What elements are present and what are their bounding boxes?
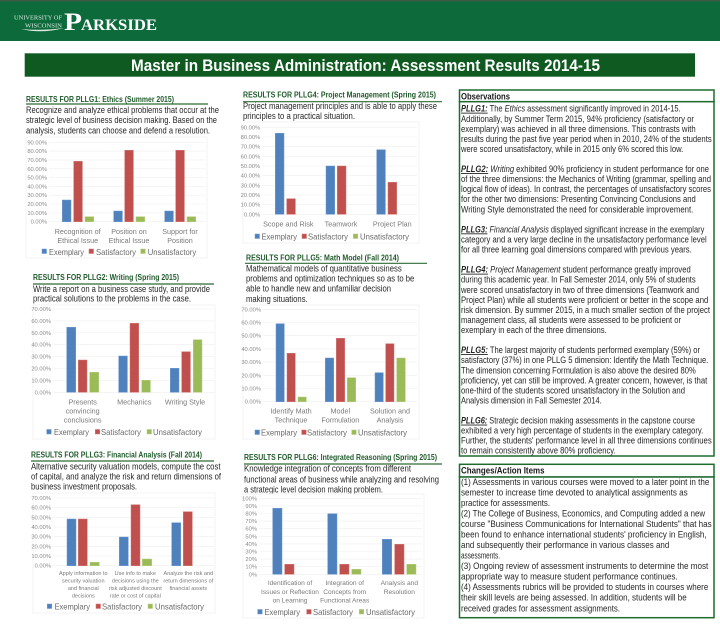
legend: PLLG2: Unsatisfactory: [153, 427, 203, 437]
bar chart: PLLG6: 70%: [245, 519, 257, 525]
bar chart: PLLG4: 60.00%: [241, 154, 260, 160]
header band: [0, 0, 720, 41]
panel: Changes/Action Items: [460, 464, 714, 618]
bar chart: PLLG2: 60.00%: [31, 319, 51, 325]
bar chart: PLLG2: convincing: [66, 406, 100, 416]
bar chart: PLLG1: 40.00%: [27, 184, 47, 190]
bar chart: PLLG2: [31, 305, 215, 439]
bar chart: PLLG1: 0.00%: [31, 220, 47, 226]
logo: University of Wisconsin Parkside: P: [64, 9, 82, 36]
legend: PLLG1: Satisfactory: [96, 247, 137, 257]
bar chart: PLLG5: Identify Math: [270, 406, 312, 415]
legend: PLLG2: Exemplary: [54, 427, 90, 437]
description: PLLG5: problems and optimization techniques so as to be: [246, 274, 414, 284]
bar chart: PLLG1: 50.00%: [27, 176, 47, 182]
text block: observations body: exemplary) was achieved in all three dimensions. This contrasts with: [461, 124, 696, 134]
legend: PLLG6: Satisfactory: [313, 607, 354, 617]
legend: PLLG5: Unsatisfactory: [358, 428, 408, 438]
legend: PLLG5: [255, 428, 408, 438]
bar chart: PLLG6: Integration of: [325, 580, 364, 587]
description: PLLG6: Knowledge integration of concepts from different: [244, 464, 411, 474]
description: PLLG3: business investment proposals.: [31, 481, 137, 491]
description: PLLG1: strategic level of business decision making. Based on the: [26, 115, 217, 125]
legend: PLLG5: Exemplary: [261, 428, 298, 438]
description: PLLG6: functional areas of business while analyzing and resolving: [244, 474, 439, 484]
bar chart: PLLG1: 90.00%: [27, 140, 47, 146]
bar chart: PLLG5: 30.00%: [241, 360, 261, 366]
bar chart: PLLG1: [26, 137, 207, 258]
bar chart: PLLG2: 70.00%: [31, 307, 51, 313]
text block: observations body: to remain consistently above 80% proficiency.: [461, 446, 616, 456]
text block: observations body: management class, all students were assessed to be proficient or: [461, 315, 681, 325]
bar chart: PLLG6: [242, 494, 424, 618]
legend: PLLG3: Unsatisfactory: [155, 602, 205, 612]
title banner: Master in Business Administration: Assessment Results 2014-15: [131, 56, 600, 75]
bar chart: PLLG1: 70.00%: [27, 158, 47, 164]
bar chart: PLLG4: Scope and Risk: [263, 220, 314, 229]
bar chart: PLLG6: Functional Areas: [320, 597, 370, 604]
bar chart: PLLG2: Presents: [69, 397, 97, 406]
description: PLLG4: [243, 101, 437, 121]
bar chart: PLLG2: Mechanics: [117, 397, 152, 406]
bar chart: PLLG3: 0.00%: [35, 564, 51, 570]
legend: PLLG4: Satisfactory: [308, 232, 349, 242]
description: PLLG3: Alternative security valuation models, compute the cost: [31, 462, 221, 472]
bar chart: PLLG3: return dimensions of: [163, 579, 214, 585]
bar chart: PLLG4: 20.00%: [241, 193, 260, 199]
bar chart: PLLG2: 10.00%: [31, 378, 51, 384]
text block: observations body: for all three learning goal dimensions compared with previous years.: [461, 244, 692, 254]
bar chart: PLLG1: 20.00%: [27, 202, 47, 208]
bar chart: PLLG3: 10.00%: [31, 554, 51, 560]
bar chart: PLLG5: Model: [331, 406, 350, 415]
bar chart: PLLG4: 10.00%: [241, 203, 260, 209]
heading: PLLG6: RESULTS FOR PLLG6: Integrated Reasoning (Spring 2015): [244, 453, 437, 462]
text block: action items body: received grades for assessment assignments.: [461, 604, 620, 614]
bar chart: PLLG1: Ethical Issue: [109, 236, 149, 245]
bar chart: PLLG2: 0.00%: [35, 390, 51, 396]
bar chart: PLLG6: 50%: [245, 534, 257, 540]
panel: PLLG4 Project Management: [241, 90, 442, 243]
bar chart: PLLG5: 40.00%: [241, 347, 261, 353]
description: PLLG6: a strategic level decision making problem.: [244, 485, 383, 495]
bar chart: PLLG4: [241, 122, 419, 243]
bar chart: PLLG2: Writing Style: [165, 397, 205, 406]
heading: Observations: Observations: [461, 91, 510, 101]
description: PLLG1: [26, 105, 219, 136]
bar chart: PLLG6: 20%: [245, 557, 257, 563]
bar chart: PLLG3: decisions using the: [112, 579, 159, 585]
text block: observations body: one-third of the students scored unsatisfactory in the Solution and: [461, 385, 685, 395]
logo: University of Wisconsin Parkside: WISCONSIN: [25, 24, 63, 30]
bar chart: PLLG5: 20.00%: [241, 373, 261, 379]
bar chart: PLLG6: 60%: [245, 527, 257, 533]
bar chart: PLLG2: 50.00%: [31, 331, 51, 337]
legend: PLLG1: Unsatisfactory: [148, 247, 197, 257]
bar chart: PLLG5: 70.00%: [241, 307, 261, 313]
heading: PLLG5: RESULTS FOR PLLG5: Math Model (Fall 2014): [246, 253, 399, 262]
bar chart: PLLG1: 80.00%: [27, 149, 47, 155]
bar chart: PLLG2: 40.00%: [31, 343, 51, 349]
text block: action items body: semester to increase time devoted to analytical assignments as: [461, 488, 688, 498]
bar chart: PLLG3: 50.00%: [31, 515, 51, 521]
bar chart: PLLG3: risk adjusted discount: [109, 586, 162, 592]
bar chart: PLLG2: 30.00%: [31, 355, 51, 361]
description: PLLG1: analysis, students can choose and defend a resolution.: [26, 126, 210, 136]
panel: Observations: [460, 90, 714, 456]
text block: observations body: were scored unsatisfactory, while in 2015 only 6% scored this low.: [460, 144, 683, 154]
bar chart: PLLG5: 60.00%: [241, 320, 261, 326]
logo: University of Wisconsin Parkside: ARKSIDE: [81, 17, 157, 34]
description: PLLG5: able to handle new and unfamiliar decision: [246, 284, 391, 294]
bar chart: PLLG5: Analysis: [377, 416, 404, 425]
legend: PLLG4: Unsatisfactory: [360, 232, 410, 242]
bar chart: PLLG5: 0.00%: [245, 400, 261, 406]
bar chart: PLLG6: 10%: [245, 565, 257, 571]
bar chart: PLLG4: Project Plan: [373, 220, 412, 229]
description: PLLG6: [244, 464, 439, 495]
legend: PLLG1: Exemplary: [49, 247, 85, 257]
bar chart: PLLG3: 20.00%: [31, 544, 51, 550]
bar chart: PLLG2: conclusions: [64, 416, 102, 424]
text block: action items body: their skill levels are being assessed. In addition, students will be: [461, 593, 687, 603]
text block: observations body: exemplary in each of the three dimensions.: [461, 325, 607, 335]
bar chart: PLLG1: Position on: [111, 227, 147, 236]
description: PLLG3: of capital, and analyze the risk and return dimensions of: [31, 471, 221, 481]
bar chart: PLLG2: 20.00%: [31, 366, 51, 372]
bar chart: PLLG3: Analyze the risk and: [164, 571, 213, 577]
bar chart: PLLG1: 30.00%: [27, 193, 47, 199]
bar chart: PLLG3: security valuation: [62, 579, 105, 585]
bar chart: PLLG4: 70.00%: [241, 145, 260, 151]
bar chart: PLLG3: 30.00%: [31, 535, 51, 541]
description: PLLG3: [31, 462, 221, 491]
heading: PLLG4: RESULTS FOR PLLG4: Project Management (Spring 2015): [243, 90, 436, 99]
logo: University of Wisconsin Parkside: UNIVERSITY OF: [14, 16, 63, 22]
bar chart: PLLG3: 40.00%: [31, 525, 51, 531]
text block: observations body: PLLG1: The Ethics assessment significantly improved in 2014-15.: [461, 104, 681, 114]
bar chart: PLLG4: 30.00%: [241, 183, 260, 189]
text block: action items body: been found to enhance international students' proficiency in English,: [461, 530, 707, 540]
bar chart: PLLG3: Use info to make: [115, 571, 156, 577]
description: PLLG5: [246, 264, 414, 304]
text block: action items body: appropriate way to measure student performance continues.: [461, 572, 678, 582]
bar chart: PLLG3: and financial: [68, 586, 99, 592]
legend: PLLG6: Unsatisfactory: [366, 607, 416, 617]
text block: action items body: assessments.: [461, 551, 500, 561]
legend: PLLG5: Satisfactory: [307, 428, 348, 438]
bar chart: PLLG3: [31, 493, 215, 613]
bar chart: PLLG5: 10.00%: [241, 386, 261, 392]
bar chart: PLLG3: 60.00%: [31, 506, 51, 512]
bar chart: PLLG6: 0%: [249, 572, 257, 578]
bar chart: PLLG1: 10.00%: [27, 211, 47, 217]
legend: PLLG1: [42, 247, 197, 257]
bar chart: PLLG4: 80.00%: [241, 135, 260, 141]
description: PLLG4: Project management principles and is able to apply these: [243, 101, 437, 111]
description: PLLG1: Recognize and analyze ethical problems that occur at the: [26, 105, 219, 115]
heading: PLLG1: RESULTS FOR PLLG1: Ethics (Summer 2015): [26, 95, 174, 104]
text block: action items body: [460, 477, 714, 618]
legend: PLLG3: Satisfactory: [102, 602, 143, 612]
bar chart: PLLG4: 0.00%: [244, 212, 260, 218]
text block: action items body: practice for assessments.: [461, 498, 550, 508]
bar chart: PLLG6: Issues or Reflection: [261, 589, 319, 596]
panel: PLLG6 Integrated Reasoning: [242, 453, 442, 618]
bar chart: PLLG1: Position: [167, 236, 193, 245]
bar chart: PLLG3: Apply information to: [59, 571, 108, 577]
legend: PLLG2: [47, 427, 203, 437]
panel: PLLG5 Math Model: [241, 253, 427, 439]
text block: observations body: Analysis dimension in Fall Semester 2014.: [461, 395, 602, 405]
bar chart: PLLG5: [241, 305, 419, 439]
text block: observations body: [460, 102, 714, 456]
bar chart: PLLG5: 50.00%: [241, 334, 261, 340]
legend: PLLG3: [47, 602, 205, 612]
bar chart: PLLG6: 80%: [245, 512, 257, 518]
description: PLLG4: principles to a practical situation.: [243, 111, 355, 121]
bar chart: PLLG6: on Learning: [273, 597, 308, 604]
bar chart: PLLG3: rate or cost of capital: [110, 593, 161, 599]
legend: PLLG2: Satisfactory: [101, 427, 142, 437]
bar chart: PLLG4: 90.00%: [241, 125, 260, 131]
text block: observations body: Additionally, by Summer Term 2015, 94% proficiency (satisfactory or: [461, 114, 694, 124]
bar chart: PLLG1: Recognition of: [55, 227, 101, 236]
bar chart: PLLG6: 30%: [245, 550, 257, 556]
description: PLLG5: making situations.: [246, 294, 308, 304]
bar chart: PLLG6: Resolution: [384, 589, 415, 596]
bar chart: PLLG6: Identification of: [268, 580, 312, 587]
bar chart: PLLG4: 40.00%: [241, 174, 260, 180]
description: PLLG2: [33, 284, 210, 304]
heading: Changes/Action Items: [460, 464, 714, 477]
bar chart: PLLG3: 70.00%: [31, 496, 51, 502]
legend: PLLG6: [258, 607, 416, 617]
text block: observations body: PLLG4: Project Management student performance greatly improved: [461, 265, 691, 275]
description: PLLG5: Mathematical models of quantitative business: [246, 264, 402, 274]
bar chart: PLLG1: Support for: [162, 227, 198, 236]
text block: observations body: Writing Style demonstrated the need for considerable improvement.: [461, 204, 693, 214]
bar chart: PLLG3: decisions: [72, 593, 95, 599]
description: PLLG2: Write a report on a business case study, and provide: [33, 284, 210, 294]
panel: PLLG1 Ethics: [26, 95, 219, 258]
bar chart: PLLG4: Teamwork: [325, 220, 358, 229]
bar chart: PLLG6: Analysis and: [381, 580, 418, 587]
description: PLLG2: practical solutions to the problems in the case.: [33, 294, 191, 304]
title banner: [25, 53, 695, 77]
panel: PLLG2 Writing: [31, 273, 215, 439]
bar chart: PLLG3: financial assets: [169, 586, 207, 592]
bar chart: PLLG1: 60.00%: [27, 167, 47, 173]
heading: Observations: [460, 90, 714, 102]
bar chart: PLLG1: Ethical Issue: [57, 236, 98, 245]
bar chart: PLLG5: Formulation: [321, 416, 359, 425]
bar chart: PLLG5: Solution and: [370, 406, 410, 415]
heading: Changes/Action Items: Changes/Action Items: [461, 466, 544, 476]
legend: PLLG6: Exemplary: [264, 607, 301, 617]
bar chart: PLLG5: Technique: [275, 416, 307, 425]
text block: action items body: and subsequently their performance in various classes and: [461, 540, 669, 550]
logo: University of Wisconsin Parkside: [14, 9, 157, 36]
legend: PLLG4: Exemplary: [262, 232, 298, 242]
bar chart: PLLG6: 100%: [242, 496, 257, 502]
legend: PLLG3: Exemplary: [54, 602, 91, 612]
bar chart: PLLG6: 40%: [245, 542, 257, 548]
panel: PLLG3 Financial Analysis: [31, 451, 221, 613]
bar chart: PLLG6: 90%: [245, 504, 257, 510]
bar chart: PLLG4: 50.00%: [241, 164, 260, 170]
heading: PLLG2: RESULTS FOR PLLG2: Writing (Spring 2015): [33, 273, 179, 282]
bar chart: PLLG6: Concepts from: [323, 589, 367, 596]
legend: PLLG4: [255, 232, 410, 242]
heading: PLLG3: RESULTS FOR PLLG3: Financial Analysis (Fall 2014): [31, 451, 202, 460]
